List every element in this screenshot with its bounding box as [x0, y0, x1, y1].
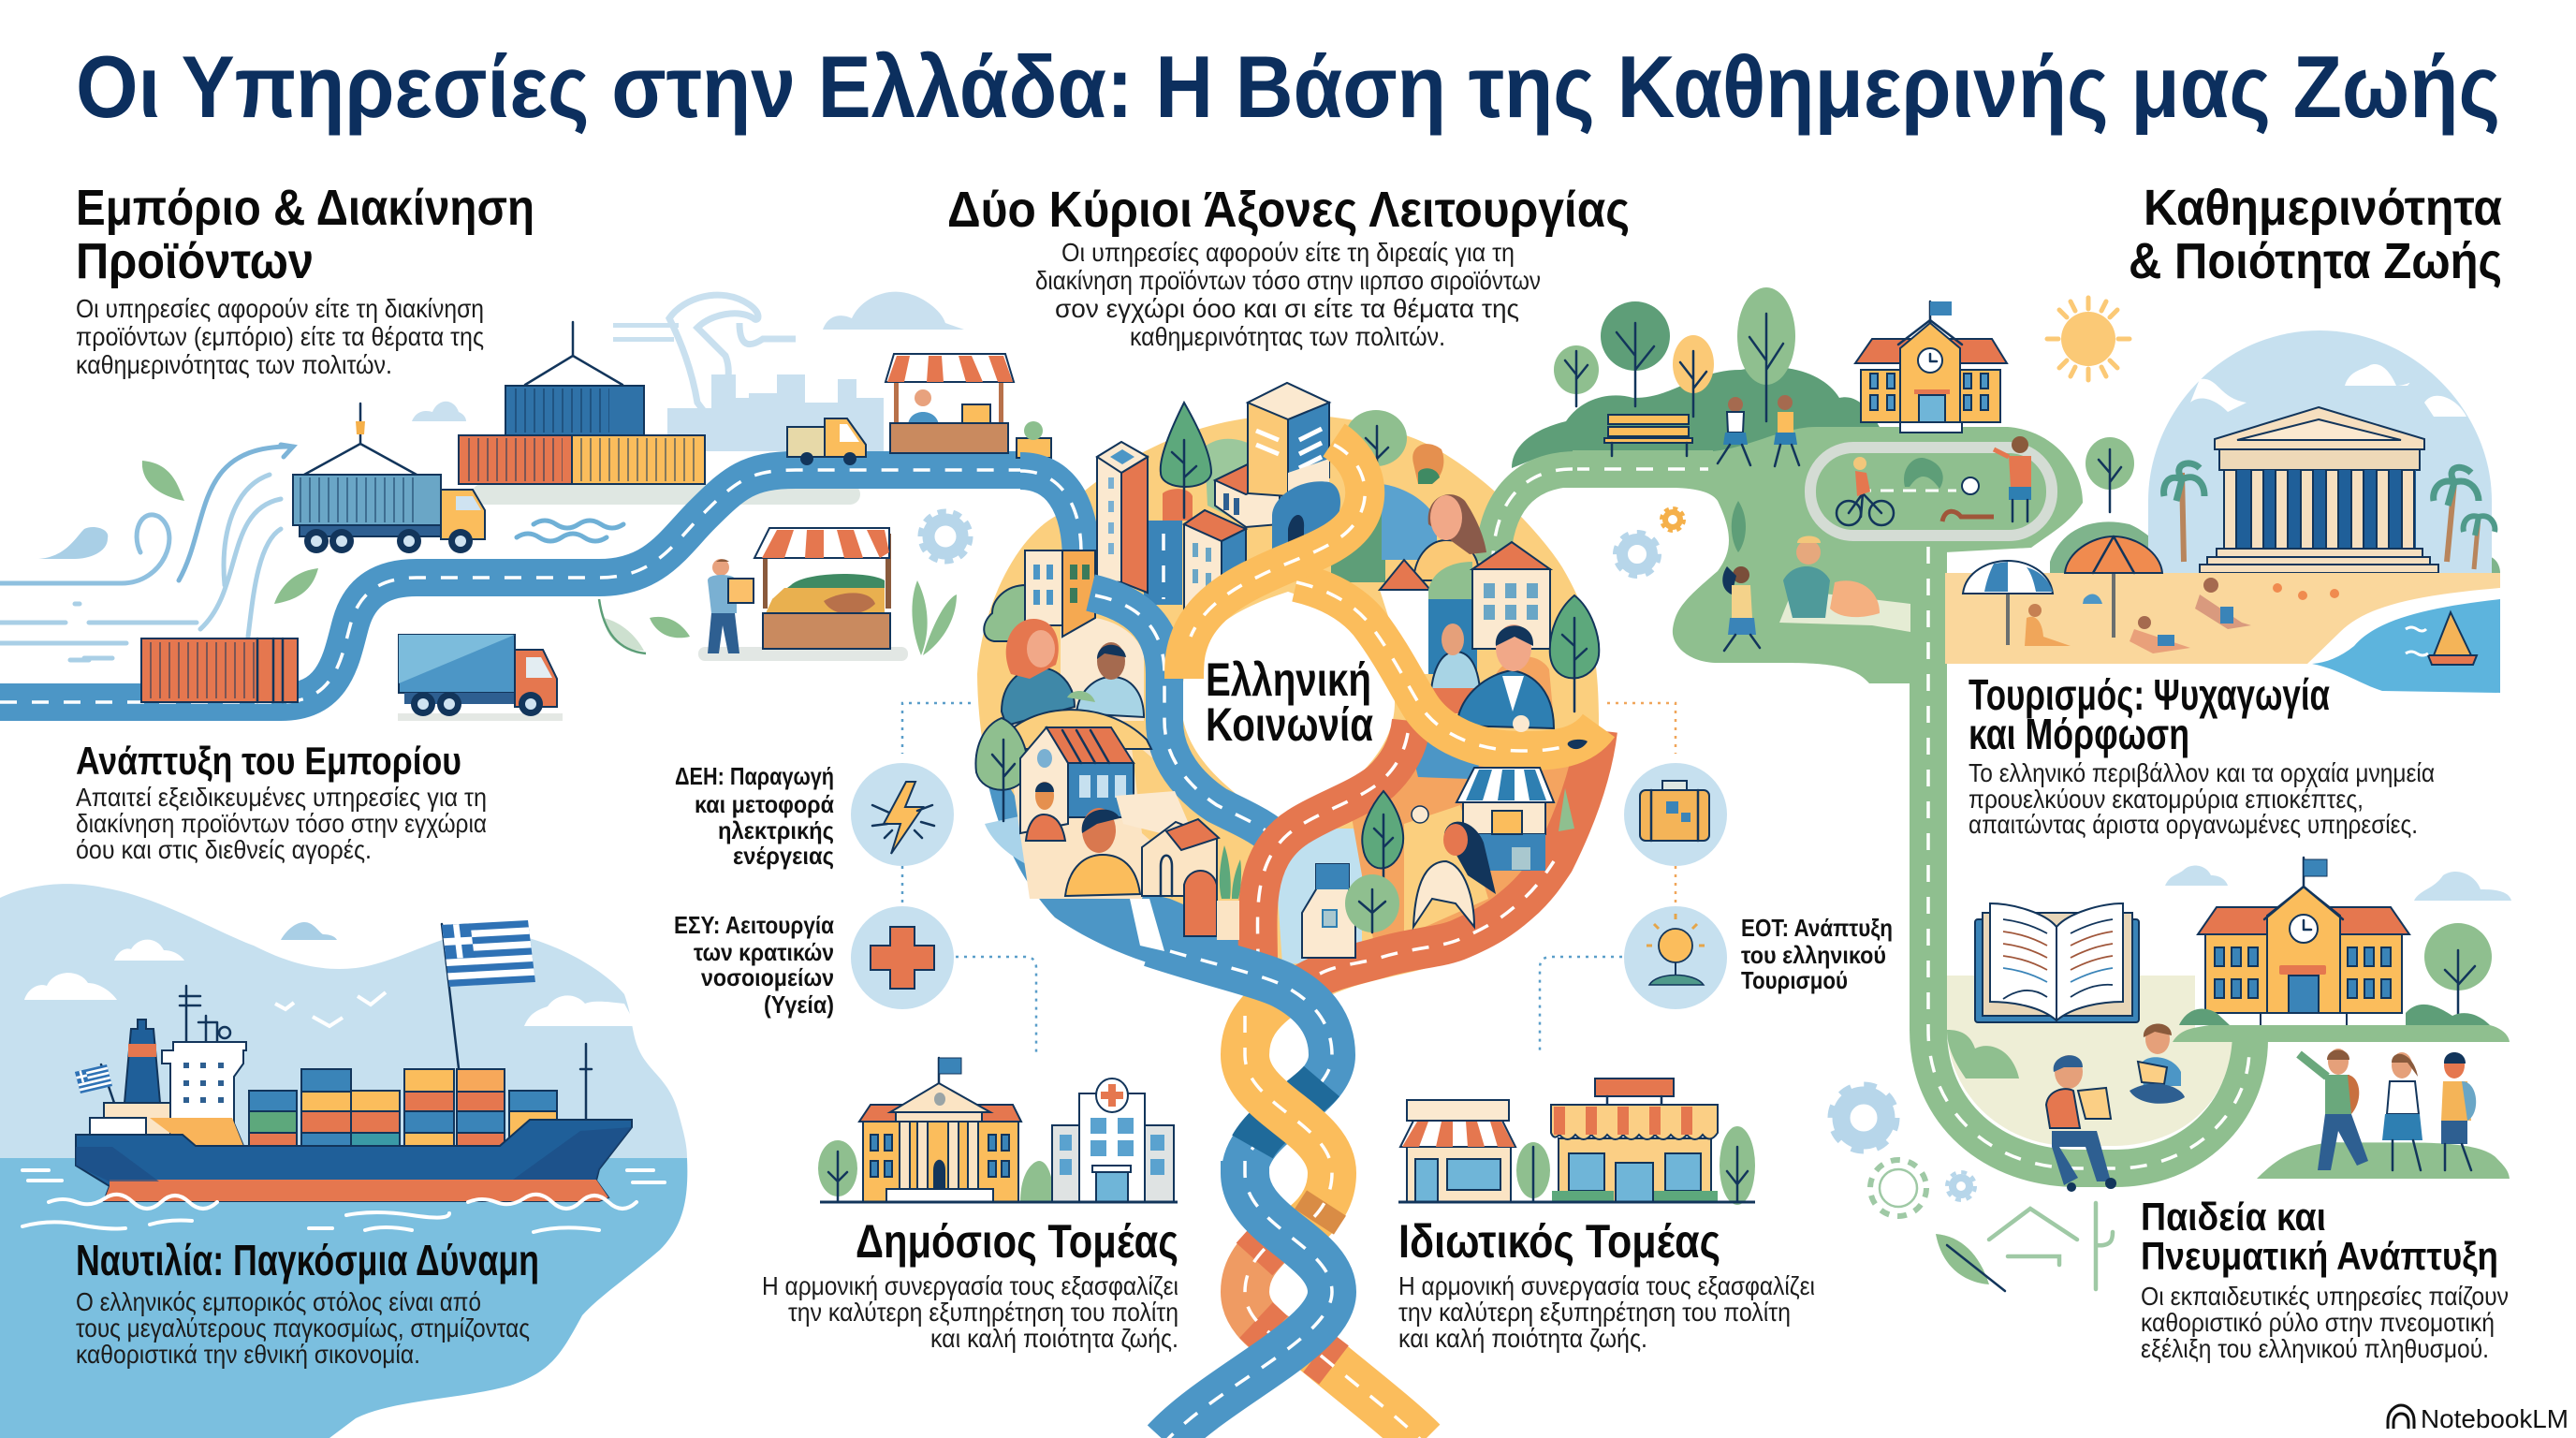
illustration: private sector shops	[1398, 1078, 1755, 1205]
text block: trade heading	[76, 180, 534, 379]
gears	[1832, 1086, 1975, 1216]
small house and trees lower right	[1302, 791, 1403, 958]
sky and sea background	[0, 884, 687, 1438]
text block: education	[2141, 1195, 2509, 1363]
people walking on path	[1718, 395, 1799, 466]
text block: public sector	[762, 1215, 1178, 1353]
text block: tourism: προυελκύουν εκατομρύρια επιοκέπτες,	[1969, 785, 2364, 814]
text block: trade development: Απαιτεί εξειδικευμένες υπηρεσίες για τη	[76, 783, 487, 812]
tree near beach	[2086, 437, 2134, 512]
container stacks	[249, 1069, 557, 1146]
ground and trees	[2173, 923, 2510, 1042]
icon: leaves and plant	[599, 580, 957, 655]
callout: ESY health service: (Υγεία)	[764, 990, 834, 1019]
text block: trade development: όου και στις διεθνείς αγορές.	[76, 835, 372, 864]
people upper left	[1002, 619, 1151, 749]
bench	[1604, 415, 1692, 456]
panel: shipping sea blob with ship	[0, 884, 687, 1438]
text block: trade development	[76, 739, 487, 864]
text block: public sector: Η αρμονική συνεργασία τους εξασφαλίζει	[762, 1271, 1178, 1300]
callout: DEH energy service: ηλεκτρικής	[718, 816, 834, 844]
road: yellow right winding road	[1296, 582, 1599, 751]
colour patches	[981, 439, 1599, 986]
text block: tourism: και Μόρφωση	[1969, 710, 2189, 758]
icon: small wave	[38, 527, 108, 559]
birds	[275, 992, 386, 1026]
central white teardrop with label: Κοινωνία	[1206, 698, 1373, 751]
text block: tourism: Τουρισμός: Ψυχαγωγία	[1969, 670, 2330, 719]
striped shop right	[1456, 768, 1574, 871]
icon: leaves near the wind lines	[142, 461, 318, 604]
sea waves	[22, 1170, 665, 1232]
text block: tourism: Το ελληνικό περιβάλλον και τα ορχαία μνημεία	[1969, 758, 2435, 787]
left building and bush	[984, 550, 1095, 641]
text block: trade heading: Προϊόντων	[76, 233, 314, 289]
man and woman right	[1430, 624, 1554, 728]
open book	[1975, 903, 2139, 1022]
text block: trade heading: καθημερινότητας των πολιτών.	[76, 350, 392, 379]
road: blue trade route	[0, 470, 1025, 702]
callout: ESY health service	[674, 906, 1036, 1053]
text block: education: Πνευματική Ανάπτυξη	[2141, 1234, 2498, 1278]
Greek temple	[2200, 407, 2438, 573]
background blob	[977, 415, 1599, 995]
icon: water ripples	[517, 521, 623, 541]
picnic and girl in park	[1722, 501, 1910, 651]
icon: gear	[921, 512, 970, 561]
callout: DEH energy service: και μετοφορά	[695, 790, 834, 818]
callout: ESY health service: των κρατικών	[694, 938, 834, 966]
text block: two main axes: καθημερινότητας των πολιτών.	[1130, 322, 1445, 351]
illustration: public sector buildings	[818, 1058, 1178, 1202]
background: green hill behind temple	[2050, 521, 2500, 573]
people lower left	[1026, 782, 1241, 951]
reader sitting cross legged	[2130, 1023, 2185, 1104]
illustration: small delivery van	[787, 418, 866, 465]
yellow upper strand	[1245, 1016, 1332, 1238]
text block: education: Οι εκπαιδευτικές υπηρεσίες παίζουν	[2141, 1282, 2509, 1311]
illustration: red shipping container	[141, 638, 298, 702]
reader seated on road	[2046, 1055, 2116, 1192]
clouds	[24, 922, 637, 1026]
text block: tourism: απαιτώντας άριστα οργανωμένες υπηρεσίες.	[1969, 810, 2418, 839]
road: yellow top winding road	[1184, 440, 1365, 679]
text block: private sector: Ιδιωτικός Τομέας	[1398, 1215, 1720, 1268]
callout: EOT tourism development: Τουρισμού	[1741, 966, 1848, 994]
gears beside heart	[1616, 508, 1684, 576]
text block: trade heading: προϊόντων (εμπόριο) είτε τα θέρατα της	[76, 322, 484, 351]
text block: daily life heading: & Ποιότητα Ζωής	[2129, 233, 2502, 289]
road: green road from heart to park	[1573, 450, 1713, 488]
clouds	[2165, 866, 2511, 901]
callout: EOT tourism development: του ελληνικού	[1741, 941, 1886, 969]
text block: trade heading: Οι υπηρεσίες αφορούν είτε τη διακίνηση	[76, 294, 484, 323]
text block: public sector: την καλύτερη εξυπηρέτηση του πολίτη	[788, 1298, 1178, 1327]
callout: ESY health service: ΕΣΥ: Αειτουργία	[674, 911, 834, 939]
sky circle behind temple	[2148, 330, 2492, 580]
house and tree left side	[975, 718, 1134, 833]
road braid	[1165, 1016, 1423, 1438]
big Greek flag on pole	[442, 920, 535, 1068]
front mast	[580, 1044, 592, 1120]
illustration: blue box truck	[398, 635, 563, 721]
panel: central heart of Greek society	[975, 383, 1599, 1173]
panel: education scene	[1832, 858, 2511, 1291]
footer: NotebookLM logo: NotebookLM	[2421, 1404, 2569, 1433]
palm trees	[2164, 463, 2495, 569]
text block: trade development: διακίνηση προϊόντων τόσο στην εγχώρια	[76, 809, 487, 838]
cream ground	[1947, 976, 2232, 1146]
text block: education: Παιδεία και	[2141, 1195, 2326, 1239]
road: orange outer road	[1306, 730, 1597, 983]
text block: trade heading: Εμπόριο & Διακίνηση	[76, 180, 534, 236]
illustration: pale city skyline and globe	[412, 292, 964, 451]
callout: EOT tourism development: ΕΟΤ: Ανάπτυξη	[1741, 914, 1893, 942]
ship superstructure	[90, 986, 246, 1146]
road: top of yellow braid strand	[1245, 990, 1287, 1055]
text block: two main axes: διακίνηση προϊόντων τόσο στην ιιρπσο σιροϊόντων	[1035, 266, 1541, 295]
text block: education: καθοριστικό ρύλο στην πνεομοτική	[2141, 1308, 2495, 1337]
town hall school top	[1855, 301, 2007, 433]
dark crossing shading on blue	[1252, 1081, 1322, 1147]
panel: trade and goods distribution scene	[0, 292, 1051, 721]
text block: two main axes: σον εγχώρι όοο και σι είτε τα θέματα της	[1055, 294, 1519, 323]
callout: DEH energy service: ΔΕΗ: Παραγωγή	[675, 762, 834, 790]
road: green road down to education	[1928, 547, 2249, 1168]
road: blue inner road	[1090, 593, 1287, 847]
background: dark green hills	[1512, 367, 1881, 468]
text block: two main axes: Δύο Κύριοι Άξονες Λειτουργίας	[947, 182, 1630, 238]
text: shipping: τους μεγαλύτερους παγκοσμίως, στημίζοντας	[76, 1313, 530, 1343]
panel: park and tourism scene	[1507, 287, 2500, 1168]
mound under students	[2257, 1142, 2510, 1179]
text block: trade development: Ανάπτυξη του Εμπορίου	[76, 739, 461, 783]
text: shipping	[76, 1236, 539, 1369]
trees in park	[1554, 287, 1795, 421]
students walking with backpacks	[2299, 1049, 2476, 1170]
woman upper right	[1413, 494, 1486, 580]
illustration: top market stall	[886, 354, 1051, 458]
text block: daily life heading	[2129, 180, 2502, 289]
text block: private sector	[1398, 1215, 1815, 1353]
text block: two main axes: Οι υπηρεσίες αφορούν είτε τη διρεαίς για τη	[1061, 238, 1515, 267]
illustration: stacked containers	[459, 322, 705, 484]
leaf and line art	[1936, 1203, 2113, 1291]
callout: tourism suitcase icon	[1607, 703, 1727, 906]
illustration: wind and sea flow lines	[0, 445, 293, 660]
text: shipping: Ο ελληνικός εμπορικός στόλος είναι από	[76, 1287, 481, 1316]
callout: DEH energy service: ενέργειας	[733, 842, 834, 870]
track oval with cyclist and player	[1810, 436, 2052, 536]
shadow under stacked containers	[472, 484, 860, 505]
text block: public sector: Δημόσιος Τομέας	[856, 1215, 1178, 1268]
green bushes	[1947, 1030, 2019, 1078]
text: shipping: καθοριστικά την εθνική σικονομία.	[76, 1340, 420, 1369]
road: blue end of trade route	[1020, 471, 1081, 562]
text: shipping: Ναυτιλία: Παγκόσμια Δύναμη	[76, 1236, 539, 1284]
tree right	[1550, 595, 1599, 712]
text block: private sector: Η αρμονική συνεργασία τους εξασφαλίζει	[1398, 1271, 1815, 1300]
sunbathers	[2025, 578, 2339, 653]
central white teardrop with label	[1181, 592, 1395, 829]
woman with flower lower right	[1412, 715, 1588, 927]
illustration: container truck on crane	[293, 404, 485, 553]
callout: EOT tourism development	[1540, 906, 1893, 1053]
central white teardrop with label: Ελληνική	[1206, 653, 1371, 706]
illustration: market stall with vendor	[698, 528, 908, 661]
text block: two main axes	[947, 182, 1630, 351]
callout: ESY health service: νοσοιομείων	[701, 963, 834, 991]
road: green start of park road	[1493, 469, 1577, 562]
beach sand	[1945, 573, 2500, 664]
background: light green park ground	[1507, 427, 2083, 683]
houses upper right	[1380, 542, 1550, 649]
callout: DEH energy service	[675, 703, 971, 906]
text block: education: εξέλιξη του ελληνικού πληθυσμού.	[2141, 1334, 2489, 1363]
road: orange inner road	[1258, 721, 1412, 964]
road: blue outer road into braid	[1151, 944, 1332, 1173]
sun	[2047, 298, 2130, 380]
ship hull	[76, 1120, 632, 1201]
text block: tourism	[1969, 670, 2435, 839]
text block: private sector: την καλύτερη εξυπηρέτηση του πολίτη	[1398, 1298, 1791, 1327]
yellow and orange strand under blue	[1245, 1226, 1423, 1438]
blue lower strand	[1165, 1161, 1332, 1438]
sea with boat	[2307, 588, 2500, 693]
buildings upper left heart	[1097, 383, 1443, 618]
beach umbrellas	[1963, 536, 2162, 645]
small stern flag	[75, 1064, 114, 1103]
school building	[2198, 858, 2409, 1026]
text block: private sector: και καλή ποιότητα ζωής.	[1398, 1324, 1647, 1353]
text block: daily life heading: Καθημερινότητα	[2144, 180, 2502, 236]
text block: public sector: και καλή ποιότητα ζωής.	[930, 1324, 1178, 1353]
